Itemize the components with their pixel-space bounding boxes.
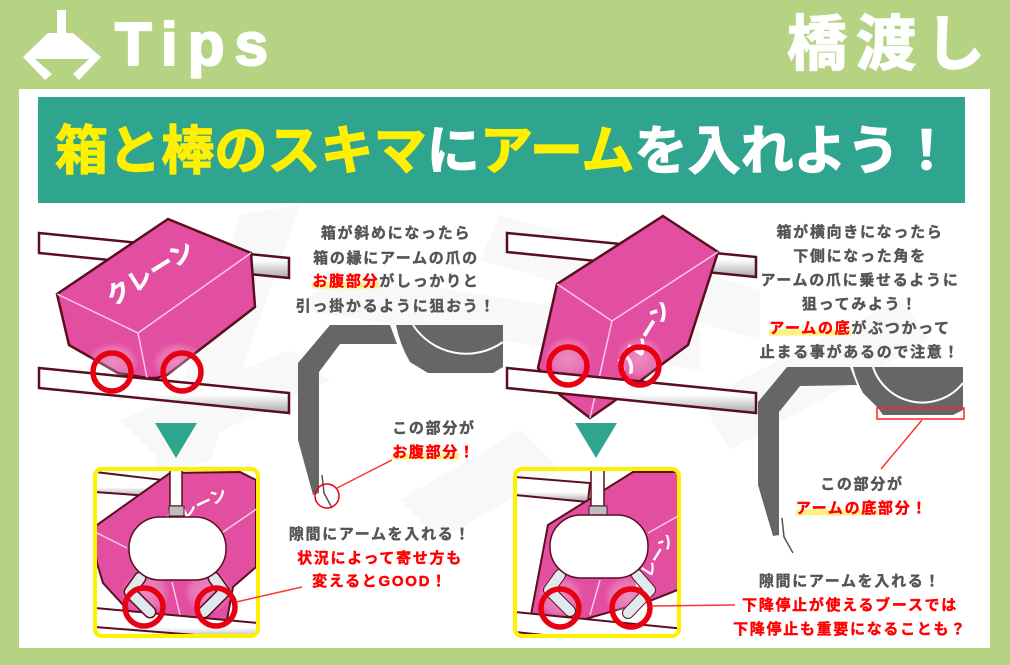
text: right instructions: アームの底がぶつかって <box>769 320 951 337</box>
box label: クレーン <box>102 236 200 311</box>
text: right instructions: 止まる事があるので注意！ <box>760 344 960 361</box>
claws <box>549 575 650 613</box>
back rail <box>39 233 289 278</box>
heading: Tips: Tips <box>115 11 268 78</box>
text: left instructions: 引っ掛かるように狙おう！ <box>296 298 496 315</box>
left inset: クレーン <box>161 484 230 530</box>
watermark <box>120 205 930 540</box>
icon: crane claw <box>23 10 101 80</box>
right inset <box>515 468 735 650</box>
claws <box>130 578 224 612</box>
arrow: right down <box>575 423 617 458</box>
box label: クレーン <box>613 297 676 380</box>
text: right instructions: 下側になった角を <box>793 248 927 265</box>
right diagram: sideways box on rails <box>507 216 756 418</box>
red circles <box>541 589 650 627</box>
text: left instructions: 箱の縁にアームの爪の <box>313 250 479 267</box>
text: bottom callout: この部分が <box>820 476 904 493</box>
heading: 橋渡し: 橋渡し <box>787 11 985 78</box>
text: left instructions <box>296 224 496 315</box>
callout circle <box>315 484 339 508</box>
red circles <box>93 353 201 391</box>
title text: 箱と棒のスキマにアームを入れよう！ <box>55 122 953 181</box>
text: left hint: 隙間にアームを入れる！ <box>289 526 471 543</box>
pointer line <box>236 587 302 602</box>
text: right instructions: 狙ってみよう！ <box>802 296 918 313</box>
pointer line <box>652 605 735 606</box>
red circles <box>549 347 659 385</box>
claw diagram: right <box>758 367 964 553</box>
claw diagram: left <box>298 325 503 508</box>
text: right instructions <box>760 224 960 361</box>
left diagram: tilted box on rails <box>39 219 289 413</box>
text: bottom callout <box>796 476 928 517</box>
text: right instructions: アームの爪に乗せるように <box>760 272 960 289</box>
pink box <box>57 219 255 378</box>
text: left instructions: 箱が斜めになったら <box>321 225 471 242</box>
text: left hint <box>289 526 471 590</box>
text: left hint: 状況によって寄せ方も <box>297 550 463 567</box>
text: left instructions: お腹部分がしっかりと <box>312 273 480 290</box>
text: right hint: 下降停止が使えるブースでは <box>742 597 958 614</box>
text: right hint: 隙間にアームを入れる！ <box>759 573 941 590</box>
right inset: クレーン <box>629 531 678 594</box>
text: belly callout <box>392 420 476 461</box>
callout box <box>877 408 964 419</box>
arrow: left down <box>155 423 197 458</box>
left inset <box>92 468 302 640</box>
title banner <box>38 97 965 203</box>
text: bottom callout: アームの底部分！ <box>796 500 928 517</box>
pink box <box>538 216 718 418</box>
text: belly callout: この部分が <box>392 420 476 437</box>
text: right hint: 下降停止も重要になることも？ <box>733 621 967 638</box>
text: belly callout: お腹部分！ <box>392 444 476 461</box>
front rail <box>507 368 756 413</box>
text: left hint: 変えるとGOOD！ <box>312 573 448 590</box>
text: right hint <box>733 573 967 638</box>
front rail <box>39 368 289 413</box>
text: right instructions: 箱が横向きになったら <box>776 224 944 241</box>
red circles <box>125 588 235 626</box>
